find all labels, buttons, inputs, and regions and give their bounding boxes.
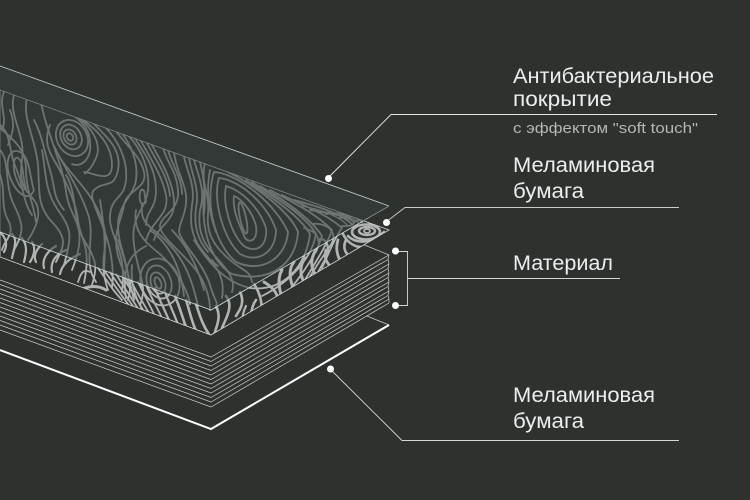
label: antibacterial coating — [513, 65, 714, 111]
leader: material bracket — [392, 248, 620, 309]
leader: coating — [325, 114, 717, 182]
knot lower centre — [153, 276, 163, 290]
label: antibacterial coating: Антибактериальное — [513, 65, 714, 88]
layer: antibacterial coating — [0, 66, 389, 310]
label: melamine paper top: бумага — [513, 180, 584, 203]
left strip stripes — [0, 232, 6, 252]
leader: melamine paper bottom — [327, 366, 679, 440]
label: melamine paper bottom — [513, 384, 655, 433]
corner knot — [364, 229, 370, 233]
label: melamine paper bottom: бумага — [513, 410, 584, 433]
leader: melamine paper top — [383, 208, 679, 226]
layer: melamine paper with wood grain — [0, 90, 389, 336]
lower-left diagonal fine stripes — [98, 268, 122, 300]
layer: core material stack — [0, 244, 389, 407]
wood grain pattern — [0, 92, 384, 336]
label: melamine paper top — [513, 154, 655, 203]
label: soft touch note: с эффектом "soft touch" — [513, 120, 698, 137]
label: antibacterial coating: покрытие — [513, 88, 612, 111]
split knot centre — [140, 190, 146, 204]
label: melamine paper bottom: Меламиновая — [513, 384, 655, 407]
label: material: Материал — [513, 252, 613, 275]
right-hand grain — [270, 190, 332, 292]
right strip stripes — [310, 249, 318, 274]
knot upper-left — [65, 132, 75, 142]
label: melamine paper top: Меламиновая — [513, 154, 655, 177]
large knot centre right — [238, 202, 248, 234]
layer: bottom melamine paper — [0, 316, 389, 429]
